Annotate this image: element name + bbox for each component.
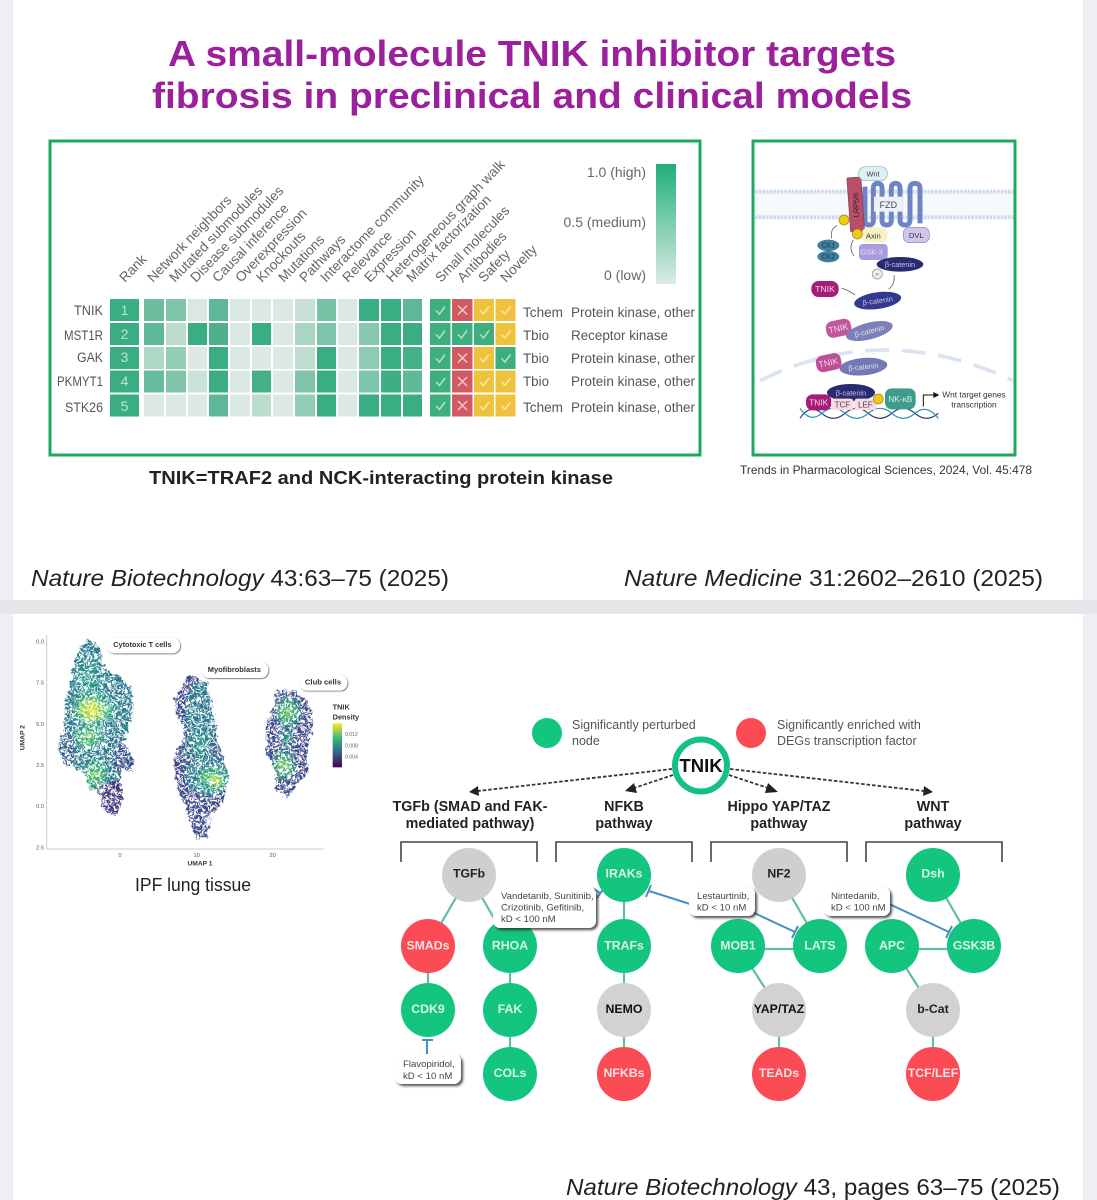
rank cells: 5	[121, 398, 129, 414]
CK1 CK2: CK2	[822, 254, 835, 261]
nodes: TGFb pathway: FAK	[498, 1002, 522, 1016]
nodes: NFKB pathway: TRAFs	[604, 938, 644, 952]
nodes: TGFb pathway: RHOA	[492, 938, 528, 952]
column headers: Interactome community	[317, 172, 427, 285]
column headers: Small molecules	[432, 203, 512, 285]
nodes: WNT pathway: Dsh	[921, 866, 945, 880]
title	[152, 33, 912, 116]
transcription label: transcription	[951, 400, 997, 410]
cell type label: myofibroblasts: Myofibroblasts	[208, 665, 261, 674]
column headers: Pathways	[296, 232, 348, 285]
nodes: NFKB pathway: NEMO	[606, 1002, 643, 1016]
nuclear complex: β-catenin	[836, 389, 866, 398]
Axin: Axin	[866, 232, 881, 241]
rank cells: 4	[121, 373, 129, 389]
column headers: Mutations	[275, 232, 327, 285]
pathway headings: Hippo YAP/TAZ	[728, 799, 831, 815]
column headers: Matrix factorization	[403, 192, 494, 285]
column headers: Knockouts	[253, 229, 309, 285]
callout: Nintedanib: kD < 100 nM	[831, 902, 886, 914]
cell type label: club cells	[299, 675, 347, 691]
colour scale legend	[564, 164, 676, 284]
target class labels: Protein kinase, other	[571, 374, 695, 389]
column headers: Mutated submodules	[166, 183, 266, 285]
callout: Vandetanib	[493, 887, 596, 928]
callout: Nintedanib: Nintedanib,	[831, 891, 880, 902]
density legend: TNIK	[333, 703, 350, 712]
callout: Flavopiridol: kD < 10 nM	[403, 1071, 452, 1082]
axes: 7.5	[36, 681, 44, 687]
transcription label	[942, 390, 1006, 410]
column headers: Overexpression	[232, 206, 310, 285]
axes: UMAP 2	[20, 725, 27, 750]
node: TNIK hub	[675, 740, 727, 792]
callout: Vandetanib: Vandetanib, Sunitinib,	[501, 891, 594, 902]
pathway headings	[393, 799, 962, 832]
axes	[20, 635, 323, 868]
density legend: 0.012	[345, 732, 358, 738]
pathway headings: NFKB	[604, 799, 644, 815]
axes: UMAP 1	[187, 861, 213, 868]
column headers: Causal inference	[209, 201, 292, 285]
callout: Vandetanib: kD < 100 nM	[501, 914, 556, 925]
TNIK beta-catenin at envelope: TNIK	[818, 356, 839, 370]
nodes: Hippo pathway: NF2	[767, 866, 791, 880]
callout: Flavopiridol	[395, 1054, 461, 1084]
nodes: TGFb pathway: TGFb	[453, 866, 485, 880]
target class labels: Protein kinase, other	[571, 305, 695, 320]
beta-catenin free: β-catenin	[862, 294, 893, 307]
target class labels: Tchem	[523, 400, 563, 415]
column headers: Safety	[475, 247, 513, 285]
colour scale legend: 0 (low)	[604, 267, 646, 283]
nodes: WNT pathway: TCF/LEF	[908, 1066, 959, 1080]
check and cross cells	[430, 299, 516, 416]
Axin	[862, 227, 888, 243]
nodes: WNT pathway: GSK3B	[953, 938, 995, 952]
nodes: Hippo pathway	[711, 848, 847, 1101]
LRP5/6: LRP5/6	[851, 193, 860, 217]
legend: enriched transcription factor: Significantly enriched with	[777, 718, 921, 732]
pathway headings: mediated pathway)	[406, 816, 535, 832]
cell type label: cytotoxic T cells	[107, 638, 180, 653]
TNIK beta-catenin at envelope: β-catenin	[848, 361, 879, 373]
transcription arrow	[923, 392, 939, 407]
pathway headings: TGFb (SMAD and FAK-	[393, 799, 548, 815]
legend: enriched transcription factor: DEGs transcription factor	[777, 734, 917, 748]
axes: 2.5	[36, 846, 44, 852]
column headers: Antibodies	[454, 229, 510, 285]
cell type label: myofibroblasts	[202, 662, 268, 678]
axes: 20	[270, 853, 276, 859]
citation: bottom Nature Biotechnology: Nature Biotechnology 43, pages 63–75 (2025)	[566, 1174, 1060, 1200]
network edges	[428, 875, 974, 1074]
nodes: Hippo pathway: LATS	[804, 938, 836, 952]
nodes: TGFb pathway: CDK9	[411, 1002, 445, 1016]
colour scale legend: 1.0 (high)	[587, 164, 646, 180]
CK1 CK2: CK1	[822, 243, 835, 250]
row labels: PKMYT1	[57, 374, 103, 389]
row labels: MST1R	[64, 328, 103, 343]
cell type label: cytotoxic T cells: Cytotoxic T cells	[113, 640, 171, 649]
phospho released: P	[876, 272, 879, 277]
cell type label: club cells: Club cells	[305, 678, 341, 687]
target class labels: Receptor kinase	[571, 328, 668, 343]
FZD receptor	[865, 183, 920, 225]
target class labels	[523, 305, 695, 415]
row labels: GAK	[77, 350, 103, 365]
column headers: Expression	[361, 226, 419, 285]
target class labels: Tbio	[523, 374, 549, 389]
axes: 0.0	[36, 640, 44, 646]
target class labels: Tchem	[523, 305, 563, 320]
target class labels: Tbio	[523, 328, 549, 343]
CK1 CK2	[817, 240, 839, 262]
cluster: myofibroblasts	[172, 674, 230, 840]
nodes: NFKB pathway	[597, 848, 651, 1101]
axes: 5.0	[36, 722, 44, 728]
column headers	[116, 157, 540, 285]
transcription label: Wnt target genes	[942, 390, 1006, 400]
row labels	[57, 303, 103, 415]
target class labels: Protein kinase, other	[571, 351, 695, 366]
nodes: TGFb pathway	[401, 848, 537, 1101]
nuclear complex	[806, 384, 916, 410]
DNA helix	[800, 408, 938, 418]
heatmap cells	[144, 299, 422, 416]
cluster: cytotoxic T cells	[58, 638, 135, 816]
TNIK beta-catenin complex: TNIK	[828, 321, 849, 335]
panel: top slide	[13, 0, 1083, 600]
nodes: NFKB pathway: NFKBs	[604, 1066, 645, 1080]
legend: perturbed node: Significantly perturbed	[572, 718, 696, 732]
heatmap caption: TNIK=TRAF2 and NCK-interacting protein kinase	[149, 468, 613, 488]
legend: enriched transcription factor	[736, 718, 921, 748]
panel: Wnt signalling diagram	[753, 141, 1015, 455]
GSK-3: GSK-3	[861, 248, 883, 257]
target class labels: Protein kinase, other	[571, 400, 695, 415]
TNIK beta-catenin complex: β-catenin	[854, 323, 885, 339]
callout: Flavopiridol: Flavopiridol,	[403, 1059, 455, 1070]
Wnt diagram citation: Trends in Pharmacological Sciences, 2024, Vol. 45:478	[740, 464, 1032, 477]
nodes: Hippo pathway: YAP/TAZ	[754, 1002, 805, 1016]
column headers: Heterogeneous graph walk	[383, 157, 508, 285]
nuclear complex: NK-κB	[888, 394, 913, 404]
rank cells: 2	[121, 326, 129, 342]
beta-catenin cytoplasmic: β-catenin	[885, 260, 915, 269]
Wnt ligand: Wnt	[866, 169, 880, 178]
Wnt ligand	[859, 167, 887, 181]
colour scale legend: 0.5 (medium)	[564, 214, 646, 230]
panel: bottom slide	[13, 614, 1083, 1200]
column headers: Network neighbors	[144, 192, 235, 285]
column headers: Disease submodules	[187, 183, 287, 285]
nuclear complex: LEF	[858, 400, 873, 409]
callout: Lestaurtinib: Lestaurtinib,	[697, 891, 749, 902]
panel: UMAP density plot	[20, 635, 360, 868]
citation: Nature Medicine: Nature Medicine 31:2602–2610 (2025)	[624, 565, 1043, 591]
nodes: TGFb pathway: SMADs	[406, 938, 450, 952]
pathway headings: pathway	[595, 816, 653, 832]
phospho released	[872, 269, 882, 279]
TNIK free	[811, 281, 839, 297]
nuclear envelope	[760, 350, 1013, 381]
pathway headings: WNT	[917, 799, 950, 815]
row labels: STK26	[65, 400, 103, 415]
column headers: Rank	[116, 252, 149, 285]
rank cells	[110, 299, 139, 416]
nodes: WNT pathway: APC	[879, 938, 905, 952]
caption: IPF lung tissue: IPF lung tissue	[135, 875, 251, 895]
callout: Vandetanib: Crizotinib, Gefitinib,	[501, 902, 584, 914]
rank cells: 3	[121, 349, 129, 365]
inhibition arrows	[422, 885, 952, 1054]
FZD receptor: FZD	[880, 200, 898, 210]
nodes: WNT pathway	[865, 848, 1001, 1101]
nodes: Hippo pathway: TEADs	[759, 1066, 799, 1080]
nuclear complex: TCF	[835, 400, 850, 409]
callout: Nintedanib	[824, 887, 890, 916]
axes: 10	[194, 853, 200, 859]
phospho sites	[839, 215, 862, 239]
small arrows	[831, 226, 894, 295]
title: fibrosis in preclinical and clinical models	[152, 75, 912, 116]
TNIK beta-catenin complex	[825, 317, 895, 345]
cluster: club cells	[265, 688, 315, 800]
density legend: Density	[333, 712, 360, 721]
nodes: NFKB pathway: IRAKs	[606, 866, 643, 880]
nuclear complex: TNIK	[809, 397, 829, 407]
dashed arrows from TNIK	[469, 769, 933, 796]
LRP5/6	[847, 177, 865, 232]
nodes: TGFb pathway: COLs	[494, 1066, 527, 1080]
DVL	[903, 227, 929, 243]
pathway brackets	[401, 842, 1002, 862]
beta-catenin free	[853, 289, 902, 312]
GSK-3	[859, 244, 888, 260]
membrane	[755, 192, 1013, 217]
node: TNIK hub: TNIK	[679, 755, 723, 776]
column headers: Relevance	[339, 228, 395, 285]
DVL: DVL	[909, 231, 924, 240]
nodes: Hippo pathway: MOB1	[720, 938, 756, 952]
row labels: TNIK	[74, 303, 103, 318]
TNIK beta-catenin at envelope	[815, 352, 888, 377]
axes: 0	[118, 853, 122, 859]
rank cells: 1	[121, 302, 129, 318]
legend: perturbed node	[532, 718, 696, 748]
column headers: Novelty	[497, 242, 540, 285]
nodes: WNT pathway: b-Cat	[917, 1002, 949, 1016]
axes: 2.5	[36, 763, 44, 769]
citation: Nature Biotechnology: Nature Biotechnology 43:63–75 (2025)	[31, 565, 449, 591]
density legend: 0.008	[345, 743, 358, 749]
callout: Lestaurtinib	[689, 887, 755, 916]
callout: Lestaurtinib: kD < 10 nM	[697, 902, 746, 914]
pathway headings: pathway	[750, 816, 808, 832]
title: A small-molecule TNIK inhibitor targets	[168, 33, 896, 74]
density legend: 0.004	[345, 754, 358, 760]
TNIK free: TNIK	[815, 284, 835, 294]
density legend	[333, 703, 360, 767]
target class labels: Tbio	[523, 351, 549, 366]
beta-catenin cytoplasmic	[877, 257, 923, 272]
pathway headings: pathway	[904, 816, 962, 832]
panel: target ranking heatmap	[50, 141, 700, 455]
legend: perturbed node: node	[572, 734, 600, 748]
axes: 0.0	[36, 804, 44, 810]
